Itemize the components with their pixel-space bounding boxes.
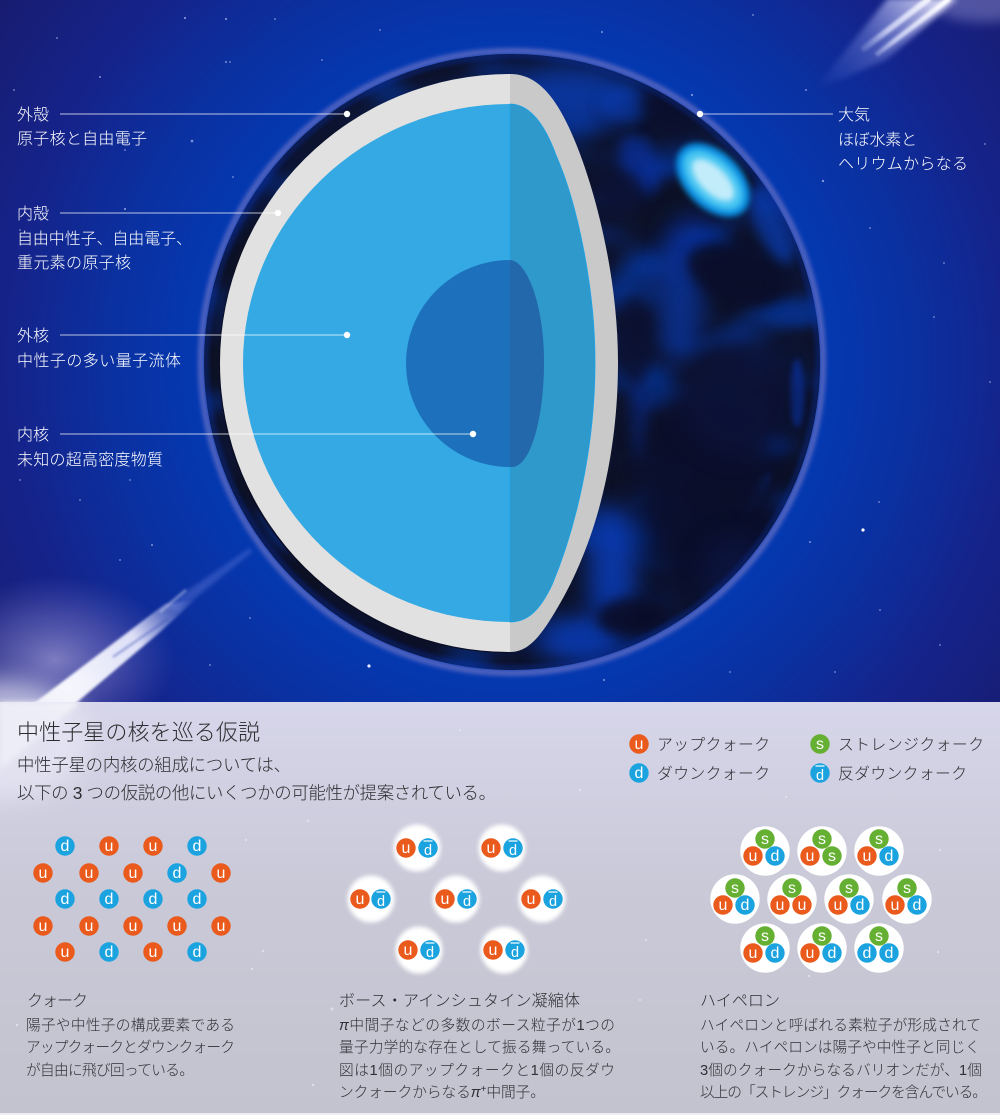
legend: down quark: ダウンクォーク	[657, 765, 770, 783]
diagram: hyperons: d	[885, 848, 893, 865]
diagram: hyperons: d	[771, 848, 779, 865]
legend: anti-down quark: d	[816, 768, 824, 784]
diagram: Bose-Einstein condensate: u	[404, 942, 412, 959]
diagram: hyperons: d	[856, 897, 864, 914]
outer core and inner crust	[243, 104, 595, 622]
diagram: hyperons: s	[828, 848, 836, 865]
diagram: hyperons: s	[761, 928, 769, 945]
neutron star atmosphere rim	[201, 51, 823, 673]
diagram: free quarks: u	[39, 865, 47, 882]
diagram: hyperons: d	[741, 897, 749, 914]
label: outer core	[17, 327, 350, 370]
diagram: free quarks: u	[61, 944, 69, 961]
diagram: free quarks: u	[149, 838, 157, 855]
diagram: Bose-Einstein condensate: u	[356, 891, 364, 908]
blue cloud patches	[193, 67, 804, 662]
diagram: hyperons: s	[731, 880, 739, 897]
diagram: hyperons: d	[863, 945, 871, 962]
outer crust	[219, 74, 618, 653]
diagram: Bose-Einstein condensate	[348, 824, 566, 974]
diagram: free quarks: u	[105, 838, 113, 855]
label: inner crust: 自由中性子、自由電子、	[17, 230, 192, 248]
diagram: free quarks: d	[105, 944, 113, 961]
legend: strange quark: s	[816, 736, 824, 753]
legend: up quark: アップクォーク	[657, 736, 770, 754]
heading: 中性子星の核を巡る仮説	[17, 720, 260, 745]
diagram: hyperons	[710, 826, 932, 973]
dark cloud patches	[232, 84, 792, 655]
diagram: hyperons: s	[845, 880, 853, 897]
label: atmosphere: ほぼ水素と	[838, 131, 917, 149]
caption: Bose-Einstein condensate	[339, 992, 620, 1101]
diagram: free quarks: u	[149, 944, 157, 961]
icon: bright atmospheric hot spot	[662, 129, 764, 231]
caption: quark: 陽子や中性子の構成要素である	[26, 1017, 235, 1034]
diagram: hyperons: s	[818, 831, 826, 848]
caption: hyperon	[700, 993, 987, 1101]
caption: hyperon: いる。ハイペロンは陽子や中性子と同じく	[700, 1039, 980, 1056]
legend	[629, 734, 984, 784]
diagram: hyperons: u	[891, 897, 899, 914]
label: atmosphere	[697, 106, 968, 173]
label: outer core: 中性子の多い量子流体	[17, 352, 181, 370]
diagram: free quarks	[33, 836, 231, 962]
diagram: Bose-Einstein condensate: d	[377, 894, 385, 910]
caption: hyperon: ハイペロンと呼ばれる素粒子が形成されて	[700, 1017, 981, 1034]
inner core	[406, 260, 544, 467]
label: inner crust	[17, 205, 281, 272]
diagram: Bose-Einstein condensate: d	[426, 945, 434, 961]
label: atmosphere: ヘリウムからなる	[838, 155, 968, 173]
caption: Bose-Einstein condensate: ボース・アインシュタイン凝縮体	[339, 992, 580, 1010]
diagram: hyperons: u	[749, 945, 757, 962]
diagram: Bose-Einstein condensate: u	[489, 942, 497, 959]
diagram: hyperons: u	[806, 848, 814, 865]
diagram: free quarks: d	[173, 865, 181, 882]
diagram: hyperons: u	[863, 848, 871, 865]
label: atmosphere: 大気	[838, 106, 870, 124]
diagram: hyperons: u	[834, 897, 842, 914]
caption: hyperon: 以上の「ストレンジ」クォークを含んでいる。	[700, 1084, 987, 1101]
diagram: hyperons: u	[776, 897, 784, 914]
legend: strange quark: ストレンジクォーク	[838, 736, 984, 754]
diagram: free quarks: u	[85, 865, 93, 882]
diagram: hyperons: s	[818, 928, 826, 945]
legend: up quark	[629, 734, 770, 754]
caption: Bose-Einstein condensate: 量子力学的な存在として振る舞っている。	[339, 1039, 620, 1056]
diagram: Bose-Einstein condensate: d	[424, 843, 432, 859]
caption: hyperon: ハイペロン	[700, 993, 780, 1010]
jet: lower left	[33, 548, 252, 704]
diagram: free quarks: u	[129, 918, 137, 935]
legend: up quark: u	[635, 736, 643, 753]
diagram: Bose-Einstein condensate: u	[402, 840, 410, 857]
diagram: hyperons: s	[761, 831, 769, 848]
intro text: 中性子星の内核の組成については、	[17, 755, 291, 775]
caption: Bose-Einstein condensate: 図は1個のアップクォークと1個の反ダウ	[339, 1062, 615, 1079]
diagram: free quarks: d	[61, 891, 69, 908]
diagram: Bose-Einstein condensate: u	[441, 891, 449, 908]
diagram: hyperons: s	[788, 880, 796, 897]
diagram: hyperons: d	[771, 945, 779, 962]
diagram: Bose-Einstein condensate: d	[509, 843, 517, 859]
label: outer crust	[17, 106, 350, 148]
diagram: free quarks: d	[193, 944, 201, 961]
diagram: free quarks: u	[39, 918, 47, 935]
cutaway interior of the star	[219, 74, 618, 653]
diagram: free quarks: d	[105, 891, 113, 908]
diagram: free quarks: d	[193, 838, 201, 855]
legend: down quark: d	[635, 765, 643, 782]
diagram: free quarks: u	[173, 918, 181, 935]
label: outer core: 外核	[17, 327, 49, 345]
legend: anti-down quark: 反ダウンクォーク	[838, 765, 967, 783]
diagram: hyperons: d	[913, 897, 921, 914]
diagram: hyperons: u	[719, 897, 727, 914]
starry background	[0, 0, 1000, 745]
legend: down quark	[629, 763, 770, 783]
diagram: free quarks: d	[149, 891, 157, 908]
diagram: hyperons: u	[749, 848, 757, 865]
intro text: 以下の 3 つの仮説の他にいくつかの可能性が提案されている。	[17, 783, 496, 803]
caption: Bose-Einstein condensate: 中間子。	[486, 1084, 545, 1101]
label: inner crust: 内殻	[17, 205, 49, 223]
diagram: hyperons: u	[798, 897, 806, 914]
diagram: free quarks: u	[129, 865, 137, 882]
diagram: Bose-Einstein condensate: u	[487, 840, 495, 857]
diagram: hyperons: d	[885, 945, 893, 962]
caption: quark	[26, 992, 235, 1079]
diagram: free quarks: u	[85, 918, 93, 935]
label: inner core: 未知の超高密度物質	[17, 451, 163, 469]
panel: hypotheses	[0, 680, 1000, 1115]
label: inner core	[17, 426, 476, 469]
diagram: free quarks: u	[217, 865, 225, 882]
caption: quark: アップクォークとダウンクォーク	[26, 1039, 235, 1056]
intro text	[17, 755, 496, 803]
diagram: free quarks: d	[193, 891, 201, 908]
diagram: Bose-Einstein condensate: u	[527, 891, 535, 908]
diagram: hyperons: s	[903, 880, 911, 897]
diagram: Bose-Einstein condensate: d	[549, 894, 557, 910]
caption: Bose-Einstein condensate: ンクォークからなるπ	[339, 1085, 481, 1101]
caption: Bose-Einstein condensate: π中間子などの多数のボース粒子が1つの	[339, 1017, 615, 1034]
label: outer crust: 原子核と自由電子	[17, 130, 147, 148]
label: outer crust: 外殻	[17, 106, 49, 124]
diagram: hyperons: s	[875, 831, 883, 848]
label: inner core: 内核	[17, 426, 49, 444]
jet: upper right	[828, 0, 959, 80]
diagram: hyperons: s	[875, 928, 883, 945]
diagram: free quarks: d	[61, 838, 69, 855]
caption: hyperon: 3個のクォークからなるバリオンだが、1個	[700, 1062, 982, 1079]
diagram: hyperons: u	[806, 945, 814, 962]
diagram: hyperons: d	[828, 945, 836, 962]
diagram: Bose-Einstein condensate: d	[511, 945, 519, 961]
diagram: free quarks: u	[217, 918, 225, 935]
caption: quark: クォーク	[27, 992, 88, 1010]
caption: Bose-Einstein condensate: +	[481, 1084, 487, 1095]
legend: anti-down quark	[810, 763, 967, 784]
label: inner crust: 重元素の原子核	[17, 254, 131, 272]
caption: quark: が自由に飛び回っている。	[26, 1062, 194, 1079]
diagram: Bose-Einstein condensate: d	[463, 894, 471, 910]
neutron star surface	[193, 50, 830, 680]
